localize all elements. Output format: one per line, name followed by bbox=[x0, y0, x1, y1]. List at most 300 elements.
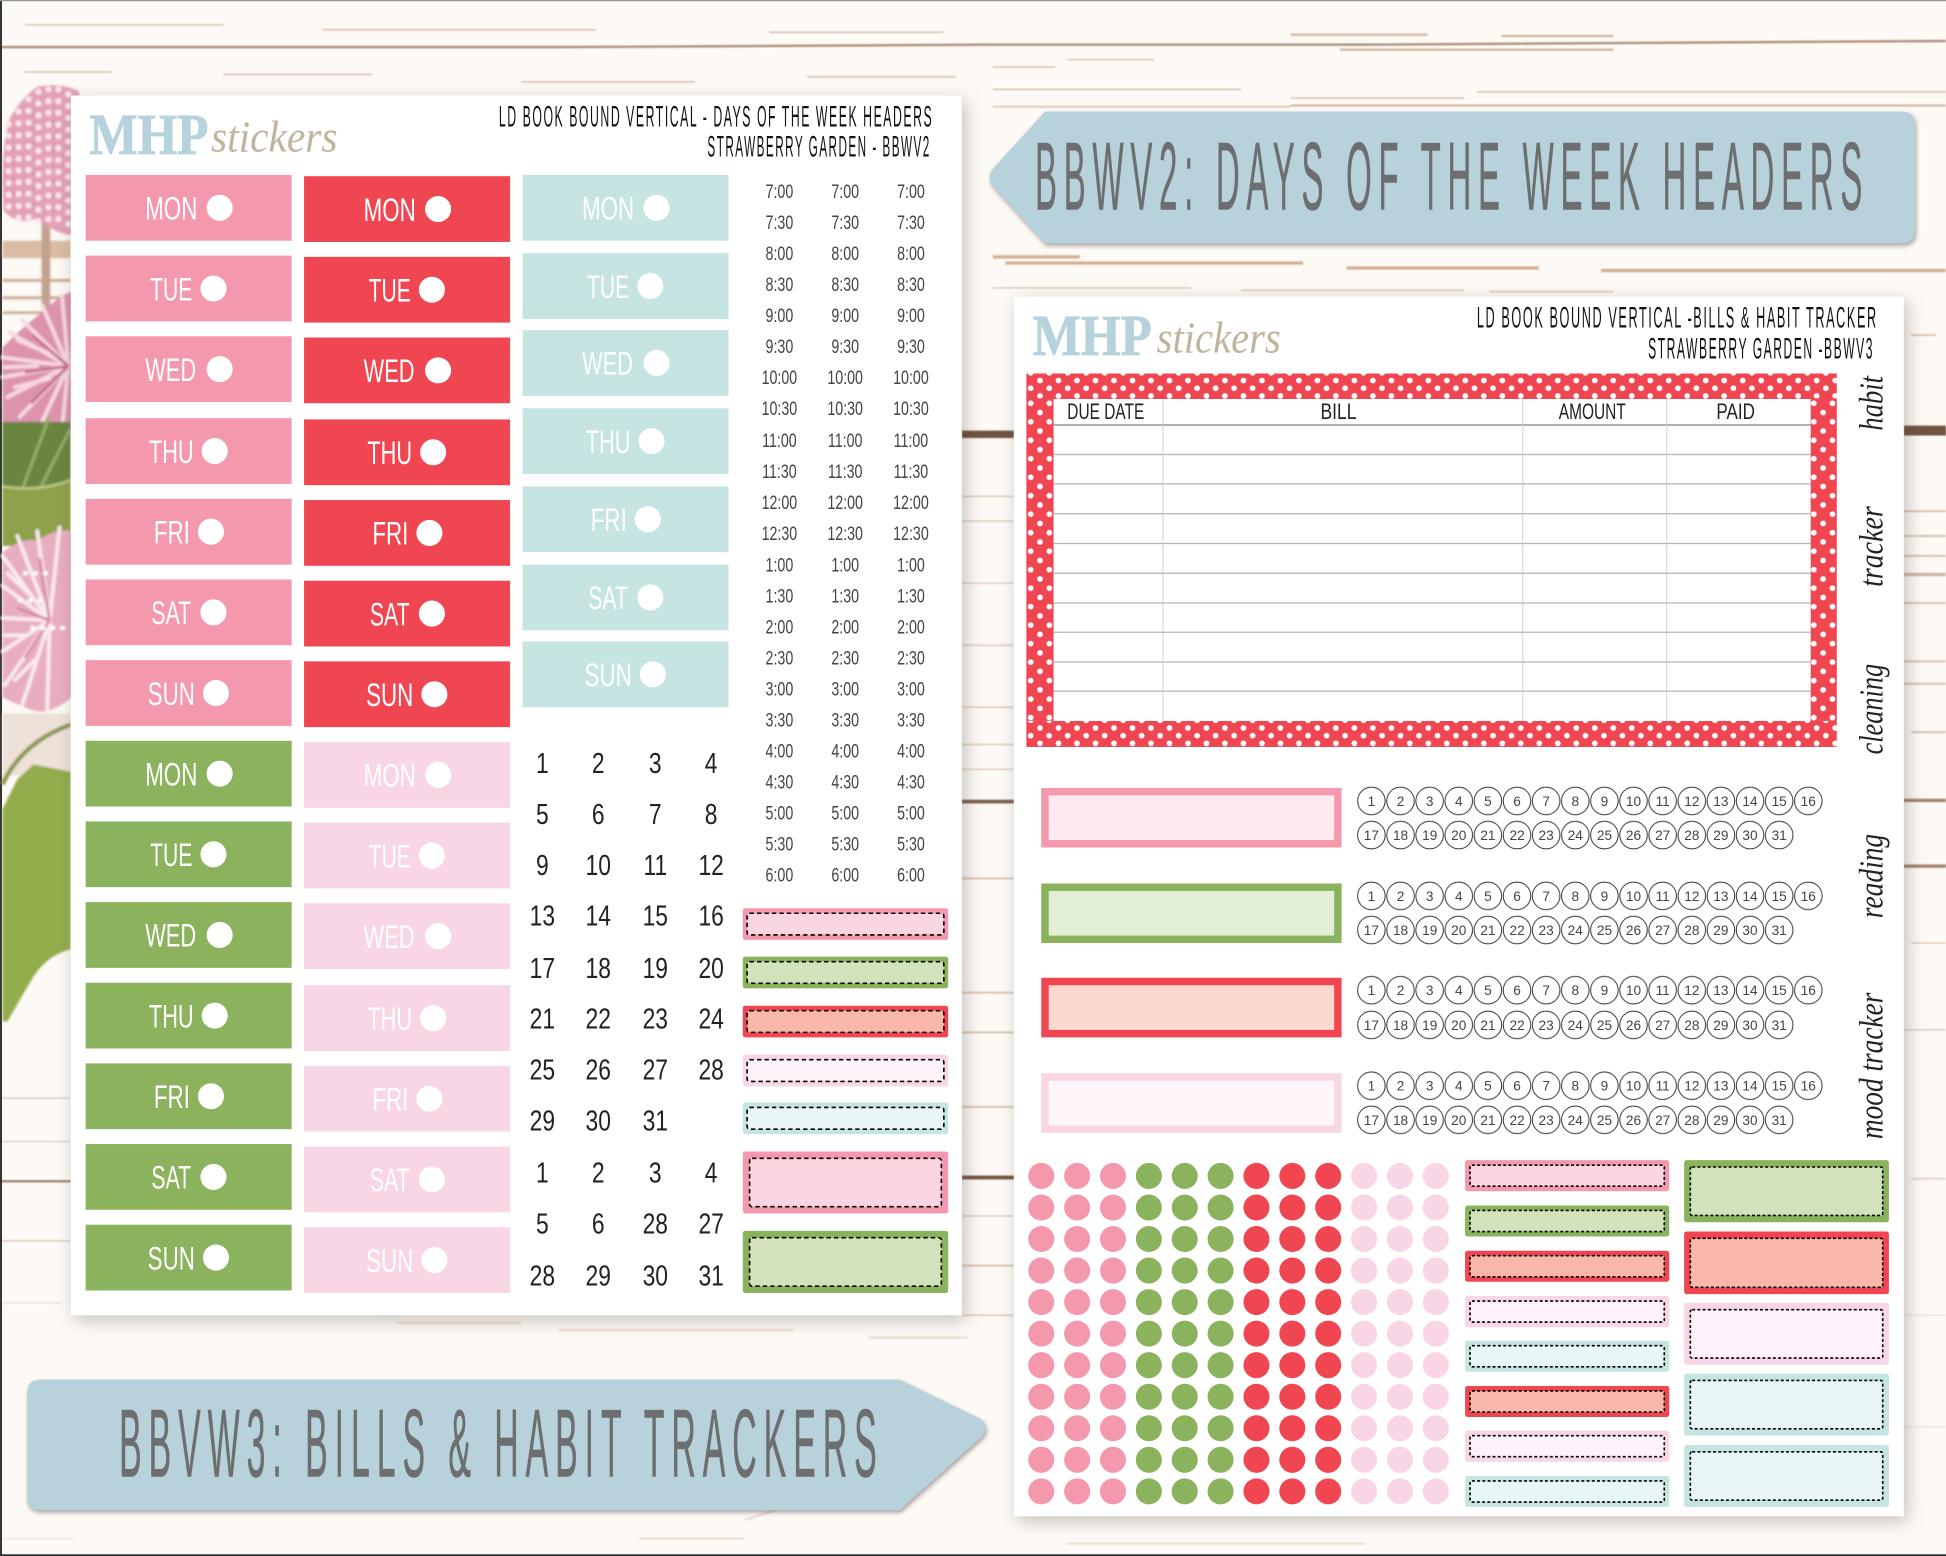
time labels: 9:30 bbox=[897, 336, 925, 357]
time labels: 8:30 bbox=[766, 274, 793, 295]
number tracker 4: 16 bbox=[1801, 1079, 1816, 1094]
calendar date numbers: 2 bbox=[592, 749, 605, 780]
time labels: 2:30 bbox=[766, 647, 793, 669]
number tracker 2: 2 bbox=[1397, 889, 1404, 904]
vertical script labels: mood tracker bbox=[1854, 992, 1891, 1139]
time labels: 8:00 bbox=[766, 243, 793, 264]
number tracker 4: 20 bbox=[1451, 1113, 1467, 1128]
number tracker 4: 17 bbox=[1364, 1113, 1379, 1128]
top bubbly flower bbox=[3, 85, 79, 236]
number tracker 2: 18 bbox=[1393, 923, 1408, 938]
number tracker 4: 21 bbox=[1480, 1113, 1496, 1128]
number tracker 2: 22 bbox=[1509, 923, 1525, 938]
time labels: 9:30 bbox=[831, 336, 859, 357]
time labels: 1:30 bbox=[897, 585, 925, 607]
number tracker 3: 13 bbox=[1713, 983, 1728, 998]
number tracker 2: 24 bbox=[1568, 923, 1583, 938]
logo: MHP bbox=[89, 102, 208, 167]
time labels: 12:30 bbox=[827, 523, 863, 545]
number tracker 4: 28 bbox=[1684, 1113, 1699, 1128]
number tracker 3: 22 bbox=[1509, 1018, 1525, 1033]
number tracker 4: 2 bbox=[1397, 1079, 1404, 1094]
time labels: 5:00 bbox=[766, 802, 793, 824]
time labels: 1:30 bbox=[831, 585, 859, 607]
light pink day headers: TUE bbox=[369, 838, 411, 874]
green day headers: TUE bbox=[150, 837, 192, 873]
calendar date numbers: 5 bbox=[536, 800, 549, 831]
number tracker 4: 7 bbox=[1542, 1079, 1550, 1094]
number tracker 1: 19 bbox=[1422, 828, 1437, 843]
time labels: 5:00 bbox=[897, 802, 925, 824]
panel: BBWV2 days of the week sheet bbox=[71, 96, 962, 1315]
flowers and leaves at left edge bbox=[2, 85, 79, 1021]
time labels: 5:00 bbox=[831, 802, 859, 824]
time labels: 9:30 bbox=[766, 336, 793, 357]
number tracker 3: 2 bbox=[1397, 983, 1404, 998]
number tracker 1: 27 bbox=[1655, 828, 1670, 843]
light pink day headers: SUN bbox=[366, 1243, 413, 1279]
middle spiky flower bbox=[2, 290, 74, 429]
number tracker 3: 20 bbox=[1451, 1018, 1467, 1033]
red day headers bbox=[304, 176, 510, 727]
number tracker 1: 4 bbox=[1455, 794, 1463, 809]
time labels: 8:00 bbox=[831, 243, 859, 264]
green day headers: WED bbox=[145, 918, 196, 954]
number tracker 2: 8 bbox=[1571, 889, 1579, 904]
calendar date numbers: 22 bbox=[586, 1004, 611, 1035]
number tracker 3: 29 bbox=[1713, 1018, 1728, 1033]
pink day headers: WED bbox=[145, 352, 196, 388]
calendar date numbers: 1 bbox=[536, 749, 549, 780]
time labels: 7:00 bbox=[766, 181, 793, 202]
number tracker 1: 7 bbox=[1542, 794, 1550, 809]
calendar date numbers: 31 bbox=[643, 1106, 668, 1137]
number tracker 3: 8 bbox=[1571, 983, 1579, 998]
number tracker 1: 30 bbox=[1742, 828, 1758, 843]
number tracker 4: 6 bbox=[1513, 1079, 1521, 1094]
number tracker 1: 8 bbox=[1571, 794, 1579, 809]
time labels: 11:00 bbox=[828, 430, 862, 452]
red day headers: SAT bbox=[370, 596, 410, 632]
calendar date numbers: 29 bbox=[530, 1106, 555, 1137]
calendar date numbers: 16 bbox=[698, 901, 724, 932]
number tracker 4: 1 bbox=[1368, 1079, 1375, 1094]
number tracker 3: 17 bbox=[1364, 1018, 1379, 1033]
calendar date numbers: 8 bbox=[705, 800, 717, 831]
number tracker 1: 9 bbox=[1601, 794, 1608, 809]
number tracker 1: 23 bbox=[1539, 828, 1554, 843]
red day headers: FRI bbox=[372, 516, 408, 552]
time labels: 10:30 bbox=[893, 398, 929, 419]
number tracker 1: 3 bbox=[1426, 794, 1434, 809]
time labels: 6:00 bbox=[766, 864, 793, 886]
text: LD BOOK BOUND VERTICAL - DAYS OF THE WEEK HEADERS bbox=[499, 101, 933, 134]
calendar date numbers: 20 bbox=[698, 953, 724, 984]
pink day headers: MON bbox=[145, 191, 197, 227]
number tracker 3: 25 bbox=[1597, 1018, 1612, 1033]
calendar date numbers: 5 bbox=[536, 1209, 549, 1240]
vertical script labels: tracker bbox=[1854, 505, 1891, 587]
light pink day headers: THU bbox=[367, 1001, 412, 1037]
number tracker 1: 13 bbox=[1713, 794, 1728, 809]
calendar date numbers: 30 bbox=[586, 1106, 611, 1137]
number tracker 3: 10 bbox=[1626, 983, 1641, 998]
logo: stickers bbox=[1157, 312, 1281, 362]
number tracker 4 bbox=[1357, 1071, 1823, 1135]
time labels: 5:30 bbox=[831, 833, 859, 855]
number tracker 2: 27 bbox=[1655, 923, 1670, 938]
number tracker 4: 8 bbox=[1571, 1079, 1579, 1094]
number tracker 4: 27 bbox=[1655, 1113, 1670, 1128]
number tracker 3: 26 bbox=[1626, 1018, 1641, 1033]
calendar date numbers: 9 bbox=[536, 850, 549, 881]
number tracker 4: 4 bbox=[1455, 1079, 1463, 1094]
number tracker 1: 24 bbox=[1568, 828, 1583, 843]
calendar date numbers: 12 bbox=[698, 850, 724, 881]
time labels: 11:30 bbox=[894, 461, 928, 483]
number tracker 4: 31 bbox=[1772, 1113, 1787, 1128]
number tracker 4: 11 bbox=[1656, 1079, 1670, 1094]
calendar date numbers: 11 bbox=[643, 850, 667, 881]
time labels: 4:00 bbox=[831, 740, 859, 762]
time labels: 1:00 bbox=[831, 554, 859, 576]
number tracker 3 bbox=[1357, 975, 1823, 1040]
number tracker 4: 14 bbox=[1742, 1079, 1758, 1094]
number tracker 4: 5 bbox=[1484, 1079, 1492, 1094]
time labels: 8:00 bbox=[897, 243, 925, 264]
number tracker 3: 15 bbox=[1772, 983, 1787, 998]
pink day headers bbox=[86, 175, 292, 726]
pink day headers: SAT bbox=[151, 595, 191, 631]
number tracker 2: 14 bbox=[1742, 889, 1758, 904]
calendar date numbers: 13 bbox=[530, 901, 555, 932]
number tracker 3: 24 bbox=[1568, 1018, 1583, 1033]
number tracker 1: 17 bbox=[1364, 828, 1379, 843]
calendar date numbers: 2 bbox=[592, 1158, 605, 1189]
panel: BBWV3 bills and habit tracker sheet bbox=[1014, 297, 1904, 1516]
time labels: 10:00 bbox=[762, 367, 797, 388]
light pink day headers: SAT bbox=[370, 1162, 410, 1198]
pink day headers: TUE bbox=[150, 271, 192, 307]
time labels: 4:30 bbox=[766, 771, 793, 793]
calendar date numbers: 31 bbox=[698, 1261, 724, 1292]
time labels: 3:00 bbox=[766, 678, 793, 700]
number tracker 2: 31 bbox=[1772, 923, 1787, 938]
bill tracker table: PAID bbox=[1716, 399, 1755, 424]
number tracker 4: 25 bbox=[1597, 1113, 1612, 1128]
time labels: 1:30 bbox=[766, 585, 793, 607]
number tracker 4: 12 bbox=[1684, 1079, 1699, 1094]
number tracker 4: 9 bbox=[1601, 1079, 1608, 1094]
time labels: 2:00 bbox=[831, 616, 859, 638]
number tracker 1: 29 bbox=[1713, 828, 1728, 843]
text: STRAWBERRY GARDEN - BBWV2 bbox=[707, 130, 931, 163]
time labels: 4:30 bbox=[831, 771, 859, 793]
calendar date numbers: 28 bbox=[643, 1209, 668, 1240]
calendar date numbers: 7 bbox=[649, 800, 662, 831]
number tracker 3: 11 bbox=[1656, 983, 1670, 998]
time labels: 12:30 bbox=[893, 523, 929, 545]
number tracker 2: 9 bbox=[1601, 889, 1608, 904]
number tracker 1: 5 bbox=[1484, 794, 1492, 809]
stem and big leaf bbox=[2, 713, 71, 776]
number tracker 1: 26 bbox=[1626, 828, 1641, 843]
time labels: 10:30 bbox=[827, 398, 863, 419]
mint day headers bbox=[522, 175, 729, 707]
number tracker 2: 15 bbox=[1772, 889, 1787, 904]
vertical script labels: cleaning bbox=[1854, 664, 1891, 754]
vertical script labels: reading bbox=[1854, 834, 1891, 918]
red day headers: WED bbox=[364, 353, 415, 389]
sheet background bbox=[1014, 297, 1904, 1516]
number tracker 4: 13 bbox=[1713, 1079, 1728, 1094]
calendar date numbers: 25 bbox=[530, 1055, 555, 1086]
calendar date numbers: 4 bbox=[705, 1158, 717, 1189]
time labels: 7:30 bbox=[897, 212, 925, 233]
number tracker 3: 9 bbox=[1601, 983, 1608, 998]
green day headers: FRI bbox=[154, 1079, 190, 1115]
number tracker 4: 15 bbox=[1772, 1079, 1787, 1094]
narrow dashed strips bbox=[1465, 1160, 1669, 1507]
number tracker 1: 6 bbox=[1513, 794, 1521, 809]
time labels: 2:00 bbox=[897, 616, 925, 638]
number tracker 3: 14 bbox=[1742, 983, 1758, 998]
number tracker 3: 28 bbox=[1684, 1018, 1699, 1033]
red day headers: TUE bbox=[369, 273, 411, 309]
light pink day headers bbox=[304, 742, 510, 1293]
number tracker 3: 31 bbox=[1772, 1018, 1787, 1033]
calendar date numbers: 28 bbox=[530, 1261, 555, 1292]
banner: BBVW3 bills and habit trackers bbox=[27, 1380, 985, 1510]
number tracker 2: 23 bbox=[1539, 923, 1554, 938]
dark foliage and green leaf band bbox=[2, 422, 71, 491]
number tracker 4: 19 bbox=[1422, 1113, 1437, 1128]
time labels: 10:00 bbox=[827, 367, 863, 388]
calendar date numbers: 21 bbox=[530, 1004, 555, 1035]
time labels: 3:00 bbox=[831, 678, 859, 700]
time labels: 4:30 bbox=[897, 771, 925, 793]
bill tracker table: DUE DATE bbox=[1067, 399, 1144, 424]
time labels: 8:30 bbox=[831, 274, 859, 295]
number tracker 2: 6 bbox=[1513, 889, 1521, 904]
sheet background bbox=[71, 96, 962, 1315]
number tracker 2: 4 bbox=[1455, 889, 1463, 904]
time labels: 11:00 bbox=[762, 430, 797, 452]
time labels: 6:00 bbox=[897, 864, 925, 886]
time labels: 1:00 bbox=[766, 554, 793, 576]
time labels: 3:30 bbox=[897, 709, 925, 731]
number tracker 1: 18 bbox=[1393, 828, 1408, 843]
mint day headers: SAT bbox=[588, 580, 628, 616]
number tracker 2: 28 bbox=[1684, 923, 1699, 938]
time labels: 6:00 bbox=[831, 864, 859, 886]
number tracker 1: 14 bbox=[1742, 794, 1758, 809]
number tracker 2: 20 bbox=[1451, 923, 1467, 938]
lower spiky flower bbox=[2, 530, 74, 712]
number tracker 3: 18 bbox=[1393, 1018, 1408, 1033]
number tracker 4: 22 bbox=[1509, 1113, 1525, 1128]
bill tracker table bbox=[1026, 373, 1837, 747]
time labels: 11:30 bbox=[762, 461, 797, 483]
calendar date numbers: 19 bbox=[643, 953, 668, 984]
calendar date numbers: 18 bbox=[586, 953, 611, 984]
calendar date numbers: 1 bbox=[536, 1158, 549, 1189]
number tracker 1: 16 bbox=[1801, 794, 1816, 809]
number tracker 1: 31 bbox=[1772, 828, 1787, 843]
time labels: 7:00 bbox=[897, 181, 925, 202]
number tracker 2: 17 bbox=[1364, 923, 1379, 938]
sheet title bbox=[1477, 302, 1878, 366]
time labels: 3:30 bbox=[766, 709, 793, 731]
number tracker 3: 27 bbox=[1655, 1018, 1670, 1033]
time labels: 4:00 bbox=[897, 740, 925, 762]
time labels: 10:00 bbox=[893, 367, 929, 388]
time labels: 4:00 bbox=[766, 740, 793, 762]
time labels: 3:00 bbox=[897, 678, 925, 700]
light pink day headers: WED bbox=[364, 919, 415, 955]
time labels: 10:30 bbox=[762, 398, 797, 419]
number tracker 2: 11 bbox=[1656, 889, 1670, 904]
red day headers: MON bbox=[364, 192, 416, 228]
number tracker 1: 28 bbox=[1684, 828, 1699, 843]
time labels: 7:00 bbox=[831, 181, 859, 202]
number tracker 4: 30 bbox=[1742, 1113, 1758, 1128]
calendar date numbers: 30 bbox=[643, 1261, 668, 1292]
time labels: 2:00 bbox=[766, 616, 793, 638]
number tracker 1: 25 bbox=[1597, 828, 1612, 843]
time labels: 8:30 bbox=[897, 274, 925, 295]
number tracker 2: 10 bbox=[1626, 889, 1641, 904]
time labels: 12:00 bbox=[762, 492, 797, 514]
calendar date numbers: 28 bbox=[698, 1055, 724, 1086]
calendar date numbers: 24 bbox=[698, 1004, 724, 1035]
mint day headers: MON bbox=[582, 191, 634, 227]
vertical script labels: habit bbox=[1854, 375, 1891, 431]
green day headers: SAT bbox=[151, 1160, 191, 1196]
number tracker 2: 1 bbox=[1368, 889, 1375, 904]
pink day headers: THU bbox=[149, 434, 194, 470]
number tracker 1: 10 bbox=[1626, 794, 1641, 809]
calendar date numbers: 14 bbox=[586, 901, 611, 932]
number tracker 2: 19 bbox=[1422, 923, 1437, 938]
number tracker 4: 26 bbox=[1626, 1113, 1641, 1128]
polka dot frame bbox=[1026, 373, 1837, 747]
number tracker 2: 13 bbox=[1713, 889, 1728, 904]
green day headers: MON bbox=[145, 756, 197, 792]
number tracker 2: 30 bbox=[1742, 923, 1758, 938]
time labels: 9:00 bbox=[897, 305, 925, 326]
number tracker 1: 22 bbox=[1509, 828, 1525, 843]
sheet title bbox=[499, 101, 933, 163]
calendar date numbers: 3 bbox=[649, 1158, 662, 1189]
calendar date numbers: 27 bbox=[643, 1055, 668, 1086]
pink day headers: FRI bbox=[154, 514, 190, 550]
wide dashed boxes bbox=[1684, 1160, 1889, 1507]
number tracker 3: 23 bbox=[1539, 1018, 1554, 1033]
number tracker 4: 29 bbox=[1713, 1113, 1728, 1128]
time labels: 3:30 bbox=[831, 709, 859, 731]
number tracker 3: 21 bbox=[1480, 1018, 1496, 1033]
number tracker 4: 10 bbox=[1626, 1079, 1641, 1094]
number tracker 1: 12 bbox=[1684, 794, 1699, 809]
number tracker 1 bbox=[1357, 786, 1823, 850]
number tracker 3: 16 bbox=[1801, 983, 1816, 998]
number tracker 3: 1 bbox=[1368, 983, 1375, 998]
calendar date numbers: 10 bbox=[586, 850, 611, 881]
number tracker 2: 29 bbox=[1713, 923, 1728, 938]
mint day headers: THU bbox=[586, 424, 630, 460]
number tracker 3: 7 bbox=[1542, 983, 1550, 998]
green day headers: SUN bbox=[148, 1240, 195, 1276]
time labels: 2:30 bbox=[897, 647, 925, 669]
time labels: 7:30 bbox=[831, 212, 859, 233]
thick border habit boxes bbox=[1045, 792, 1338, 1129]
number tracker 1: 20 bbox=[1451, 828, 1467, 843]
time labels: 11:30 bbox=[828, 461, 862, 483]
time labels: 12:00 bbox=[827, 492, 863, 514]
light pink day headers: FRI bbox=[372, 1082, 408, 1118]
time labels: 9:00 bbox=[766, 305, 793, 326]
number tracker 4: 3 bbox=[1426, 1079, 1434, 1094]
number tracker 3: 5 bbox=[1484, 983, 1492, 998]
number tracker 4: 24 bbox=[1568, 1113, 1583, 1128]
number tracker 1: 15 bbox=[1772, 794, 1787, 809]
number tracker 3: 6 bbox=[1513, 983, 1521, 998]
red day headers: SUN bbox=[366, 677, 413, 713]
logo bbox=[89, 102, 338, 167]
number tracker 3: 12 bbox=[1684, 983, 1699, 998]
logo: MHP bbox=[1033, 303, 1152, 368]
bill tracker table: AMOUNT bbox=[1559, 399, 1626, 424]
wood behind stems bbox=[2, 241, 71, 258]
calendar date numbers: 6 bbox=[592, 1209, 605, 1240]
mint day headers: WED bbox=[582, 346, 633, 382]
time labels: 12:00 bbox=[893, 492, 929, 514]
number tracker 3: 19 bbox=[1422, 1018, 1437, 1033]
calendar date numbers: 26 bbox=[586, 1055, 611, 1086]
calendar date numbers: 27 bbox=[698, 1209, 724, 1240]
number tracker 3: 30 bbox=[1742, 1018, 1758, 1033]
time labels: 5:30 bbox=[766, 833, 793, 855]
calendar date numbers: 23 bbox=[643, 1004, 668, 1035]
number tracker 1: 21 bbox=[1480, 828, 1496, 843]
number tracker 2: 12 bbox=[1684, 889, 1699, 904]
number tracker 1: 11 bbox=[1656, 794, 1670, 809]
red day headers: THU bbox=[367, 435, 412, 471]
number tracker 2: 3 bbox=[1426, 889, 1434, 904]
calendar date numbers: 6 bbox=[592, 800, 605, 831]
light pink day headers: MON bbox=[364, 758, 416, 794]
logo: stickers bbox=[211, 111, 338, 161]
calendar date numbers: 4 bbox=[705, 749, 717, 780]
time labels: 12:30 bbox=[762, 523, 797, 545]
calendar date numbers: 15 bbox=[643, 901, 668, 932]
number tracker 2: 16 bbox=[1801, 889, 1816, 904]
time labels: 9:00 bbox=[831, 305, 859, 326]
time labels: 1:00 bbox=[897, 554, 925, 576]
pink day headers: SUN bbox=[148, 676, 195, 712]
number tracker 3: 4 bbox=[1455, 983, 1463, 998]
number tracker 2: 21 bbox=[1480, 923, 1496, 938]
number tracker 4: 18 bbox=[1393, 1113, 1408, 1128]
coloured dot stickers bbox=[1041, 1176, 1436, 1493]
logo bbox=[1033, 303, 1281, 368]
calendar date numbers: 3 bbox=[649, 749, 662, 780]
dashed label strips bbox=[743, 908, 948, 1293]
number tracker 2: 5 bbox=[1484, 889, 1492, 904]
number tracker 1: 2 bbox=[1397, 794, 1404, 809]
calendar date numbers: 29 bbox=[586, 1261, 611, 1292]
